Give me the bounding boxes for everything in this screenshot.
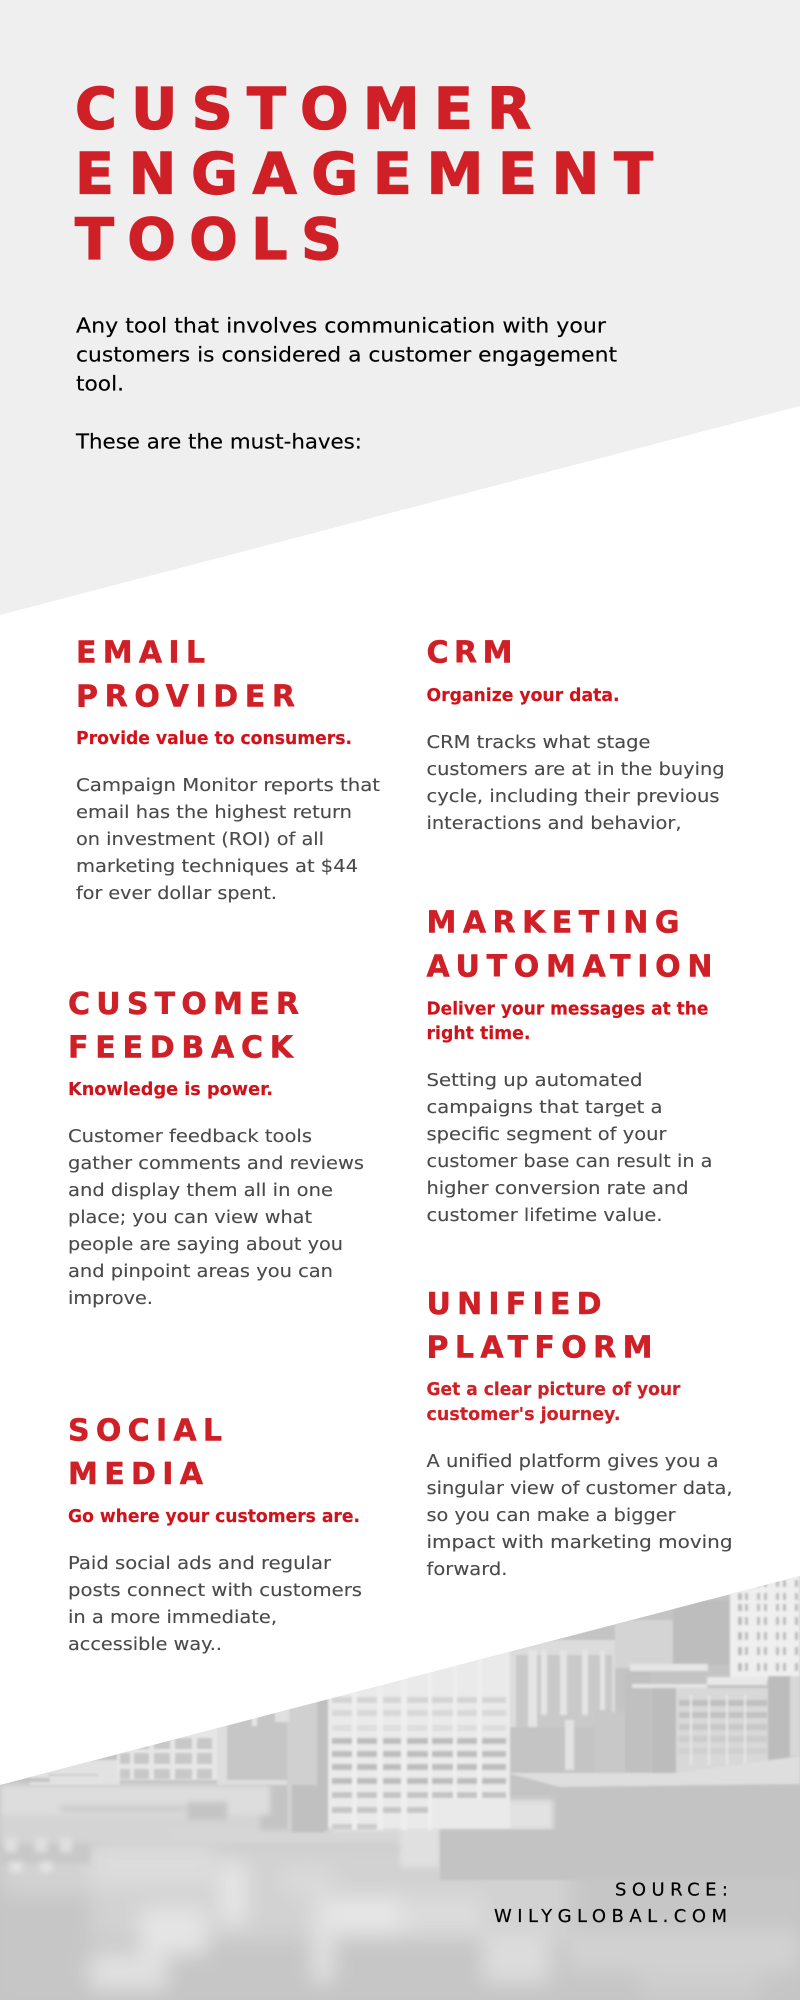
- body: marketing automation: Setting up automated: [426, 1071, 642, 1091]
- tagline: crm: Organize your data.: [426, 686, 620, 706]
- body: marketing automation: specific segment of your: [426, 1125, 667, 1145]
- body: marketing automation: campaigns that target a: [426, 1098, 662, 1118]
- body: unified platform: [426, 1452, 732, 1580]
- panel: crm: [426, 636, 724, 834]
- panel: customer feedback: [68, 987, 364, 1309]
- body: email provider: for ever dollar spent.: [76, 884, 277, 904]
- body: email provider: [76, 776, 380, 904]
- light waterfront band and dark foreground block: [507, 1756, 800, 1787]
- body: marketing automation: [426, 1071, 712, 1226]
- body: customer feedback: place; you can view what: [68, 1208, 312, 1228]
- body: customer feedback: Customer feedback tools: [68, 1127, 312, 1147]
- header grey diagonal panel: [0, 0, 800, 615]
- tagline: marketing automation: [426, 999, 709, 1044]
- panel: marketing automation: [426, 906, 712, 1226]
- intro text: Any tool that involves communication with your: [76, 314, 607, 338]
- heading: social media: SOCIAL: [68, 1414, 222, 1449]
- heading: email provider: PROVIDER: [76, 680, 295, 715]
- panel: social media: [68, 1414, 362, 1655]
- large office building with window rows: [328, 1650, 510, 1828]
- body: email provider: email has the highest return: [76, 803, 352, 823]
- source credit: WILYGLOBAL.COM: [494, 1906, 727, 1927]
- footer photo: blurred grey city skyline: [0, 1565, 800, 2000]
- tagline: email provider: Provide value to consumers.: [76, 729, 352, 749]
- body: unified platform: impact with marketing moving: [426, 1533, 732, 1553]
- title: [75, 77, 653, 273]
- intro text: tool.: [76, 372, 124, 396]
- heading: unified platform: [426, 1287, 652, 1365]
- heading: customer feedback: CUSTOMER: [68, 987, 299, 1022]
- body: unified platform: A unified platform gives you a: [426, 1452, 718, 1472]
- body: crm: CRM tracks what stage: [426, 733, 650, 753]
- tagline: marketing automation: Deliver your messages at the: [426, 999, 709, 1019]
- heading: unified platform: UNIFIED: [426, 1287, 602, 1322]
- heading: email provider: EMAIL: [76, 636, 205, 671]
- body: unified platform: forward.: [426, 1560, 508, 1580]
- body: unified platform: so you can make a bigger: [426, 1506, 676, 1526]
- heading: customer feedback: [68, 987, 299, 1065]
- tagline: unified platform: Get a clear picture of your: [426, 1380, 681, 1400]
- low building with windows, right: [676, 1688, 770, 1774]
- body: marketing automation: customer base can result in a: [426, 1152, 712, 1172]
- source credit: [494, 1880, 728, 1927]
- body: customer feedback: [68, 1127, 364, 1309]
- body: social media: posts connect with customers: [68, 1581, 362, 1601]
- body: customer feedback: gather comments and reviews: [68, 1154, 364, 1174]
- intro text: These are the must-haves:: [75, 430, 362, 454]
- source credit: SOURCE:: [615, 1880, 728, 1901]
- body: social media: in a more immediate,: [68, 1608, 277, 1628]
- title: CUSTOMER: [75, 77, 531, 143]
- body: marketing automation: higher conversion rate and: [426, 1179, 688, 1199]
- dark tower and haze: [615, 1620, 675, 1668]
- heading: unified platform: PLATFORM: [426, 1330, 652, 1365]
- intro text: [75, 314, 617, 454]
- heading: social media: MEDIA: [68, 1457, 204, 1492]
- body: email provider: on investment (ROI) of all: [76, 830, 324, 850]
- building at left, grid of windows: [30, 1760, 120, 1785]
- tagline: customer feedback: Knowledge is power.: [68, 1080, 273, 1100]
- heading: marketing automation: AUTOMATION: [426, 949, 712, 984]
- body: customer feedback: and pinpoint areas you can: [68, 1262, 333, 1282]
- body: crm: [426, 733, 724, 834]
- heading: social media: [68, 1414, 222, 1492]
- body: crm: cycle, including their previous: [426, 787, 720, 807]
- body: social media: [68, 1554, 362, 1655]
- mid-rise grey building: [510, 1640, 615, 1730]
- heading: marketing automation: [426, 906, 712, 984]
- title: TOOLS: [75, 207, 342, 273]
- tagline: marketing automation: right time.: [426, 1024, 530, 1044]
- body: crm: customers are at in the buying: [426, 760, 724, 780]
- body: unified platform: singular view of customer data,: [426, 1479, 732, 1499]
- panel: unified platform: [426, 1287, 732, 1580]
- tagline: unified platform: [426, 1380, 681, 1425]
- body: social media: accessible way..: [68, 1635, 222, 1655]
- body: social media: Paid social ads and regular: [68, 1554, 332, 1574]
- body: marketing automation: customer lifetime value.: [426, 1206, 662, 1226]
- body: customer feedback: improve.: [68, 1289, 153, 1309]
- tagline: social media: Go where your customers are.: [68, 1507, 360, 1527]
- intro text: customers is considered a customer engagement: [76, 343, 617, 367]
- tagline: unified platform: customer's journey.: [426, 1405, 620, 1425]
- title: ENGAGEMENT: [75, 142, 653, 208]
- body: customer feedback: people are saying about you: [68, 1235, 343, 1255]
- heading: email provider: [76, 636, 295, 715]
- heading: crm: CRM: [426, 636, 512, 671]
- body: crm: interactions and behavior,: [426, 814, 682, 834]
- heading: marketing automation: MARKETING: [426, 906, 680, 941]
- body: customer feedback: and display them all in one: [68, 1181, 333, 1201]
- panel: email provider: [76, 636, 380, 904]
- white tower with small windows: [730, 1565, 800, 1680]
- body: email provider: marketing techniques at $44: [76, 857, 358, 877]
- heading: customer feedback: FEEDBACK: [68, 1030, 295, 1065]
- body: email provider: Campaign Monitor reports that: [76, 776, 380, 796]
